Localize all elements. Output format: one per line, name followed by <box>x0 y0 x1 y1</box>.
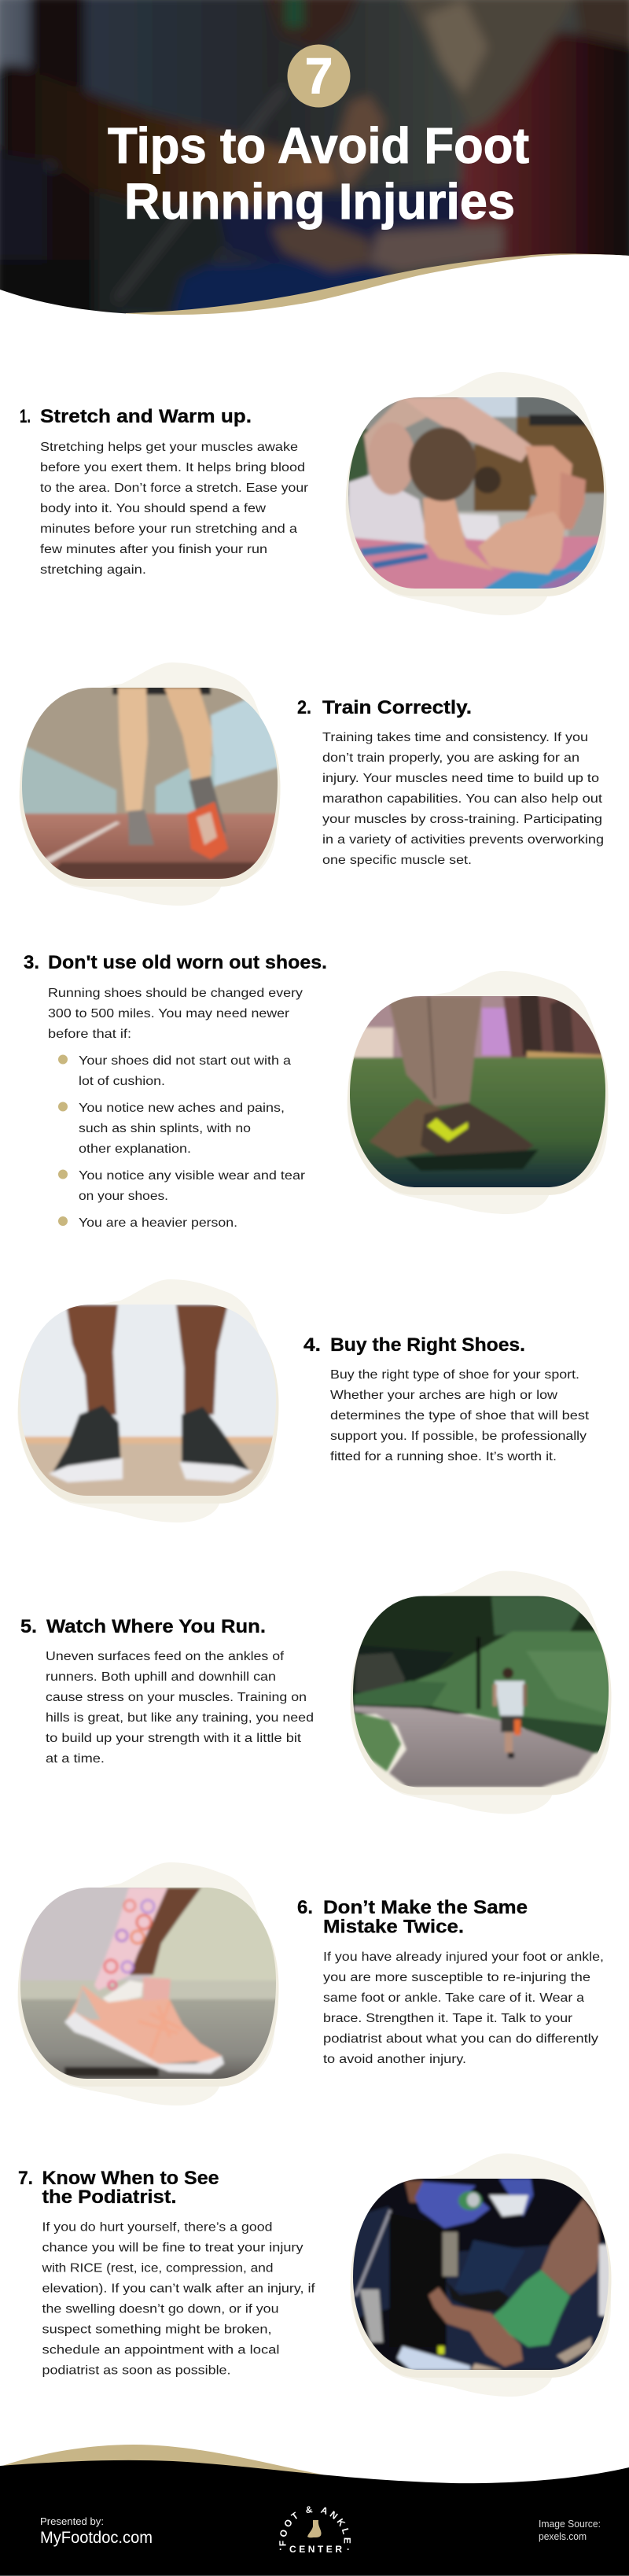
tip 2 text: marathon capabilities. You can also help out <box>322 792 603 806</box>
bullet list: Your shoes did not start out with a <box>79 1054 291 1068</box>
bullet list: You are a heavier person. <box>79 1216 237 1230</box>
tip 2 text: one specific muscle set. <box>322 854 472 867</box>
image source <box>539 2518 601 2542</box>
tip 6 text: If you have already injured your foot or ankle, <box>323 1950 604 1964</box>
tip 1 text: Stretch and Warm up. <box>40 406 252 427</box>
tip 4 image: black sneakers <box>17 1279 280 1522</box>
tip 4 text: Buy the Right Shoes. <box>330 1334 525 1356</box>
tip 6 image: peach sneaker <box>17 1862 280 2105</box>
tip 5 text <box>20 1616 314 1766</box>
image source: Image Source: <box>539 2518 601 2530</box>
tip 5 text: 5. <box>20 1616 37 1637</box>
image source: pexels.com <box>539 2530 587 2542</box>
bullet list <box>58 1054 306 1230</box>
tip 6 text: 6. <box>297 1897 313 1918</box>
logo: · <box>347 2544 350 2555</box>
tip 2 text: your muscles by cross-training. Participating <box>322 813 602 826</box>
tip 3 text: Running shoes should be changed every <box>48 987 303 1000</box>
logo: · <box>279 2544 282 2555</box>
footer gold wave <box>0 2445 350 2480</box>
title <box>108 117 529 230</box>
tip 6 text: you are more susceptible to re-injuring the <box>323 1971 590 1984</box>
tip 7 text: If you do hurt yourself, there’s a good <box>42 2220 272 2235</box>
tip 4 text <box>303 1334 590 1463</box>
bullet list: other explanation. <box>79 1142 191 1156</box>
icon: foot <box>307 2520 322 2537</box>
bullet list: You notice any visible wear and tear <box>79 1169 306 1183</box>
tip 1 text: stretching again. <box>40 563 146 577</box>
tip 5 text: Watch Where You Run. <box>46 1616 266 1637</box>
title: Tips to Avoid Foot <box>108 117 529 174</box>
tip 3 text: Don't use old worn out shoes. <box>48 952 327 973</box>
tip 7 text: with RICE (rest, ice, compression, and <box>41 2261 273 2275</box>
gold wave <box>126 253 629 315</box>
tip 6 text: Mistake Twice. <box>323 1917 464 1937</box>
tip 2 text <box>297 697 604 867</box>
bullet list: lot of cushion. <box>79 1075 165 1088</box>
footer black band <box>0 2460 629 2576</box>
tip 1 text: few minutes after you finish your run <box>40 543 267 556</box>
tip 1 image: stretching <box>344 372 608 615</box>
tip 4 text: Buy the right type of shoe for your sport. <box>330 1368 579 1382</box>
tip 4 text: fitted for a running shoe. It’s worth it. <box>330 1450 557 1463</box>
tip 7 text: chance you will be fine to treat your injury <box>42 2241 303 2255</box>
number badge: 7 <box>305 47 333 104</box>
tip 7 text: the Podiatrist. <box>42 2187 176 2208</box>
tip 1 text: to the area. Don’t force a stretch. Ease your <box>40 482 309 495</box>
tip 2 text: Train Correctly. <box>322 697 472 718</box>
tip 3 text: 3. <box>24 952 39 973</box>
logo: CENTER <box>289 2544 342 2555</box>
tip 6 text: same foot or ankle. Take care of it. Wear a <box>323 1991 584 2005</box>
bullet list: You notice new aches and pains, <box>79 1102 285 1115</box>
tip 3 text <box>24 952 327 1230</box>
tip 4 text: support you. If possible, be professionally <box>330 1430 587 1443</box>
tip 6 text: Don’t Make the Same <box>323 1897 528 1918</box>
tip 5 text: hills is great, but like any training, you need <box>46 1711 314 1725</box>
tip 7 image: taping ankle <box>349 2153 612 2397</box>
white wave <box>0 254 629 330</box>
tip 5 text: runners. Both uphill and downhill can <box>46 1670 276 1684</box>
tip 2 text: injury. Your muscles need time to build up to <box>322 772 599 785</box>
tip 1 text: before you exert them. It helps bring blood <box>40 461 305 474</box>
tip 7 text: Know When to See <box>42 2168 219 2189</box>
presented by: MyFootdoc.com <box>40 2529 153 2547</box>
tip 1 text: body into it. You should spend a few <box>40 502 266 515</box>
logo: FOOT & ANKLE <box>279 2506 351 2546</box>
tip 5 text: cause stress on your muscles. Training on <box>46 1691 307 1704</box>
tip 3 image: worn shoes on grass <box>346 971 609 1214</box>
tip 6 text <box>297 1897 604 2066</box>
tip 6 text: brace. Strengthen it. Tape it. Talk to your <box>323 2012 573 2025</box>
tip 1 text <box>20 406 309 577</box>
tip 6 text: podiatrist about what you can do differently <box>323 2032 598 2046</box>
number badge <box>288 44 351 107</box>
tip 4 text: determines the type of shoe that will best <box>330 1409 590 1423</box>
tip 7 text: suspect something might be broken, <box>42 2323 272 2337</box>
tip 3 text: 300 to 500 miles. You may need newer <box>48 1007 290 1020</box>
tip 2 text: in a variety of activities prevents overworking <box>322 833 604 847</box>
tip 5 text: Uneven surfaces feed on the ankles of <box>46 1650 285 1663</box>
tip 5 text: to build up your strength with it a little bit <box>46 1732 302 1745</box>
header photo <box>0 0 629 330</box>
header banner <box>0 0 629 330</box>
tip 7 text: podiatrist as soon as possible. <box>42 2364 231 2378</box>
tip 2 text: 2. <box>297 697 311 718</box>
tip 5 text: at a time. <box>46 1752 105 1766</box>
tip 7 text: the swelling doesn’t go down, or if you <box>42 2302 278 2316</box>
tip 3 text: before that if: <box>48 1028 131 1041</box>
tip 1 text: 1. <box>20 406 31 427</box>
tip 2 text: don’t train properly, you are asking for an <box>322 751 579 765</box>
tip 2 text: Training takes time and consistency. If you <box>322 731 588 744</box>
tip 7 text <box>18 2168 315 2378</box>
tip 7 text: 7. <box>18 2168 33 2189</box>
presented by: Presented by: <box>40 2515 104 2527</box>
tip 4 text: 4. <box>303 1334 321 1356</box>
bullet list: on your shoes. <box>79 1190 168 1203</box>
tip 7 text: elevation). If you can’t walk after an injury, if <box>42 2282 315 2296</box>
tip 1 text: Stretching helps get your muscles awake <box>40 441 298 454</box>
presented by <box>40 2515 153 2547</box>
tip 7 text: schedule an appointment with a local <box>42 2343 280 2357</box>
tip 1 text: minutes before your run stretching and a <box>40 522 297 536</box>
bullet list: such as shin splints, with no <box>79 1122 251 1135</box>
tip 4 text: Whether your arches are high or low <box>330 1389 557 1402</box>
tip 5 image: runner in park <box>349 1570 612 1814</box>
tip 2 image: runner on track <box>18 662 281 906</box>
title: Running Injuries <box>124 173 515 230</box>
tip 6 text: to avoid another injury. <box>323 2053 466 2066</box>
